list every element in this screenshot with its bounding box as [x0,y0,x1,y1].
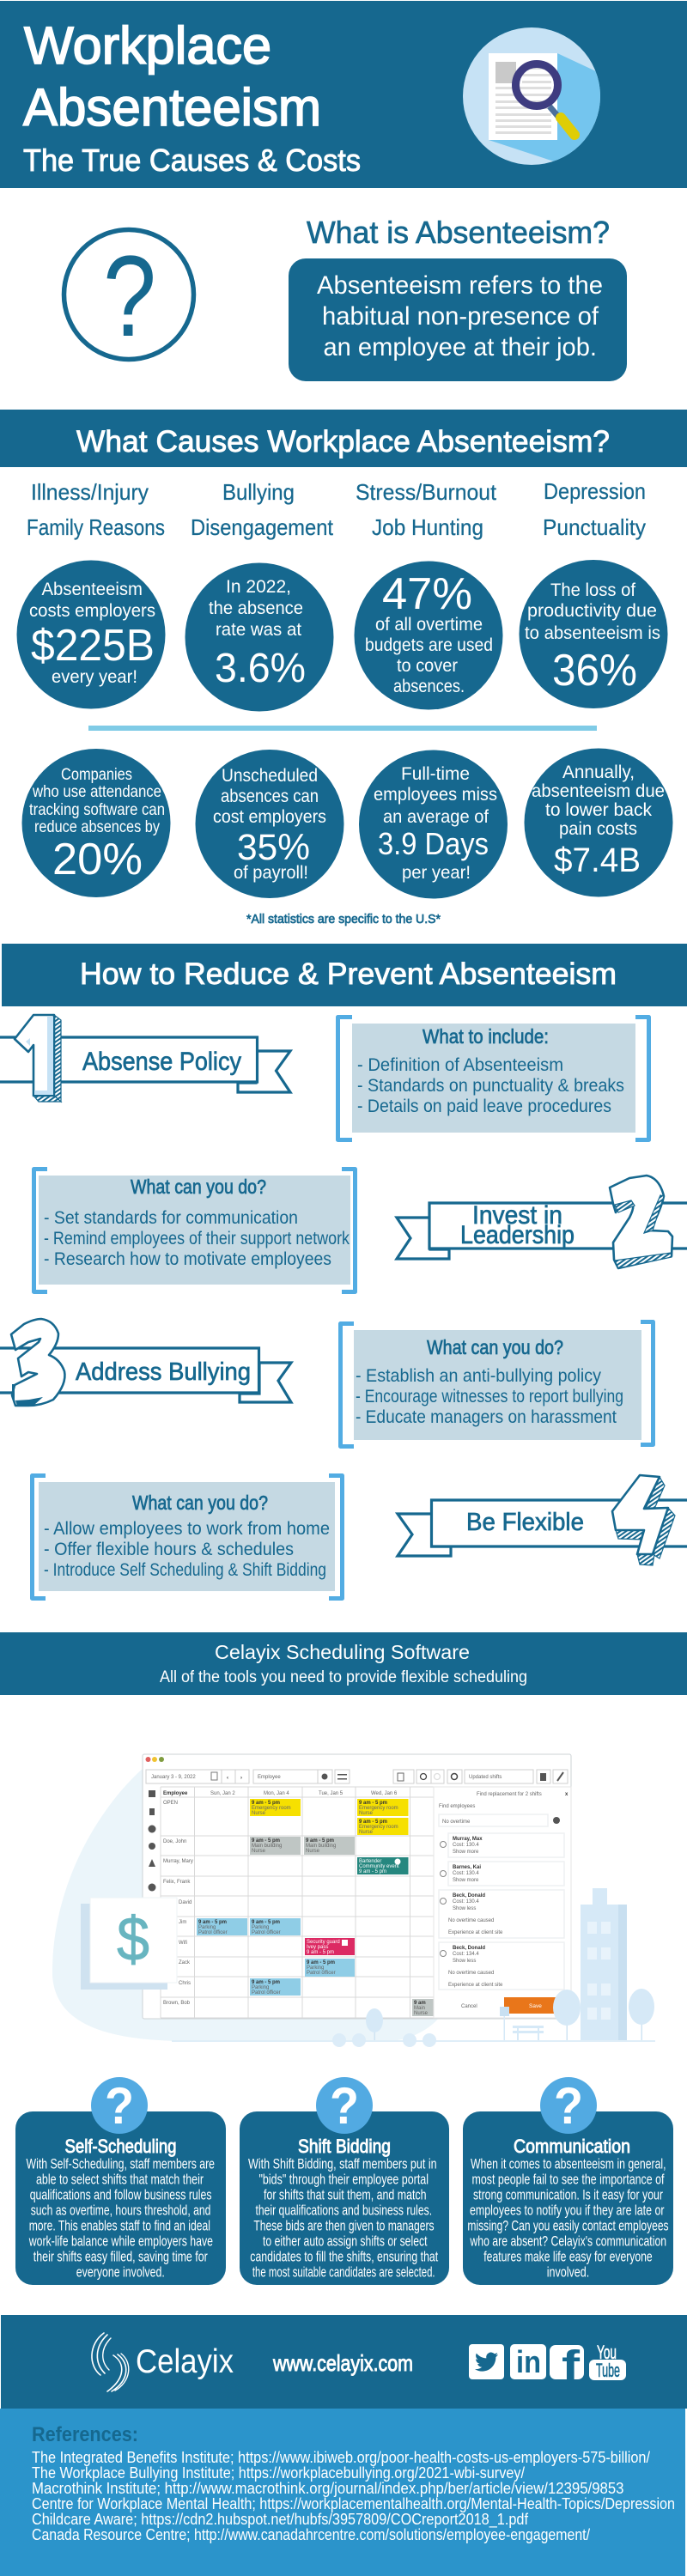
schedule grid: David [179,1900,192,1905]
stat circle: 47% [354,562,503,709]
shift blocks: Main building [252,1844,282,1849]
stat circle: 3.9 days: an average of [383,807,489,827]
title: Absenteeism [23,78,321,137]
icon: question badge: ? [105,2077,134,2135]
stat circle: 7.4B [524,749,673,896]
stat circle: 35%: absences can [221,787,319,806]
replacement side panel: Beck, Donald [453,1946,485,1951]
panel: bullying actions [340,1322,653,1446]
stat circle: 35%: 35% [237,827,310,868]
panel: what to include: - Standards on punctuality & breaks [357,1076,624,1096]
list of causes: Illness/Injury [31,479,149,505]
app window [143,1754,571,2019]
shift blocks: 9 am - 5 pm [307,1950,334,1955]
stat circle: 35%: cost employers [213,807,326,827]
shift blocks: Main [414,2006,425,2011]
shift blocks: Community event [359,1864,399,1869]
stat circle: 7.4B: absenteeism due [532,781,665,801]
shift blocks: Parking [252,1985,269,1990]
panel: shift bidding: the most suitable candidates are selected. [252,2264,435,2281]
shift blocks: Bartender [359,1859,381,1864]
shift blocks: 9 am - 5 pm [307,1960,335,1965]
panel: shift bidding: to either auto assign shifts or select [263,2233,428,2250]
icon: youtube: You [597,2342,617,2363]
stat circle: 3.9 days: Full-time [401,764,470,784]
panel: self-scheduling: their shifts easy filled, saving time for [33,2249,208,2265]
panel: flexibility actions: What can you do? [132,1492,268,1514]
replacement side panel: Murray, Max [453,1837,483,1842]
shift blocks: 9 am - 5 pm [359,1820,387,1825]
replacement side panel: No overtime caused [448,1918,494,1923]
shift blocks: Security guard [307,1940,340,1945]
toolbar: Updated shifts [469,1775,502,1780]
list of causes: Stress/Burnout [356,479,497,505]
stat circle: 20%: tracking software can [29,801,165,819]
schedule grid: Wifi [179,1941,187,1946]
stat circle: 47%: absences. [393,677,465,696]
shift blocks: Nurse [414,2011,429,2016]
panel: flexibility actions: - Allow employees to work from home [44,1519,330,1539]
shift blocks: 9 am - 5 pm [359,1801,387,1806]
stat circle: 3.6%: 3.6% [215,646,306,691]
stat circle: 3.9 days: employees miss [374,785,497,805]
section banner: causes: What Causes Workplace Absenteeism? [76,425,610,459]
ribbon 3: address bullying [0,1319,291,1406]
stat circle: 36%: to absenteeism is [525,623,660,643]
shift blocks: 9 am - 5 pm [252,1801,280,1806]
title [23,16,321,137]
toolbar: Employee [258,1775,281,1780]
stat circle: 225B: costs employers [29,601,155,621]
replacement side panel: Experience at client site [448,1930,503,1935]
ribbon 2: invest in leadership: Leadership [460,1221,575,1249]
stat circle: 7.4B: $7.4B [554,841,641,879]
definition box: Absenteeism refers to the [317,271,603,300]
shift blocks: Patrol officer [198,1930,228,1935]
schedule grid: Tue, Jan 5 [319,1791,344,1796]
schedule grid: Employee [163,1791,188,1796]
panel: leadership actions [34,1170,356,1291]
section banner: scheduling software [0,1632,687,1695]
shift blocks: Nurse [306,1849,320,1854]
panel: shift bidding: their qualifications and business rules. [256,2202,432,2219]
stat circle: 7.4B: pain costs [559,819,637,839]
stat circle: 35% [196,750,344,898]
panel: leadership actions: - Research how to motivate employees [44,1249,331,1269]
ribbon 1: absence policy [0,1015,290,1102]
list of causes: Depression [544,478,646,504]
definition box: habitual non-presence of [322,302,599,331]
icon: facebook [550,2343,584,2389]
website: www.celayix.com [272,2350,413,2376]
shift blocks: Nurse [359,1830,374,1835]
shift blocks: Nurse [252,1849,266,1854]
stat circle: 3.9 days: 3.9 Days [378,826,489,861]
shift blocks: Parking [198,1925,216,1930]
schedule grid: OPEN [163,1801,178,1806]
stat circle: 3.6%: In 2022, [226,577,291,597]
stat circle: 47%: 47% [382,569,472,619]
panel: shift bidding: These bids are then given to managers [253,2218,435,2234]
panel: leadership actions: - Remind employees of their support network [44,1229,350,1249]
schedule grid: Mon, Jan 4 [264,1791,289,1796]
toolbar: ‹ [227,1776,228,1781]
replacement side panel: Beck, Donald [453,1893,485,1899]
schedule grid: Brown, Bob [163,2001,191,2006]
panel: shift bidding [240,2077,449,2285]
replacement side panel: x [565,1792,568,1797]
section banner: reduce and prevent [2,944,687,1006]
references panel [0,2409,685,2576]
list of causes: Job Hunting [372,514,483,540]
icon: linkedin: in [516,2344,541,2379]
icon: twitter [469,2344,504,2379]
replacement side panel [434,1787,571,2018]
panel: what to include: - Definition of Absenteeism [357,1055,563,1075]
panel: self-scheduling: work-life balance while employers have [28,2233,213,2250]
panel: what to include: What to include: [423,1025,549,1048]
title: Workplace [24,16,271,75]
replacement side panel: Find employees [439,1804,475,1809]
shift blocks: 9 am - 5 pm [198,1920,227,1925]
stat circle: 20%: Companies [61,766,132,784]
city skyline [172,1888,655,2047]
shift blocks [197,1799,434,2016]
stat circle: 20%: reduce absences by [34,818,160,836]
icon: question badge [91,2077,148,2135]
panel: self-scheduling: qualifications and follow business rules [30,2187,212,2203]
stat circle: 20%: 20% [52,835,143,884]
panel: shift bidding: Shift Bidding [298,2136,391,2157]
section banner: causes [0,410,687,467]
schedule grid: Chris [179,1981,191,1986]
statistics footnote: *All statistics are specific to the U.S* [246,912,441,927]
stat circle: 7.4B: Annually, [562,762,635,782]
stat circle: 225B: $225B [31,621,155,671]
shift blocks: Main building [306,1844,336,1849]
list of causes: Punctuality [543,514,646,540]
shift blocks: Patrol officer [252,1930,281,1935]
toolbar [146,1770,568,1783]
definition box: an employee at their job. [323,333,597,361]
list of causes [27,478,646,540]
replacement side panel: No overtime caused [448,1971,494,1976]
shift blocks: Emergency room [359,1825,398,1830]
logo: Celayix [92,2333,234,2391]
schedule grid: Doe, John [163,1839,186,1844]
panel: bullying actions: - Encourage witnesses to report bullying [356,1387,623,1406]
shift blocks: 9 am [414,2001,426,2006]
list of causes: Family Reasons [27,514,165,540]
panel: flexibility actions [33,1475,342,1599]
icon: youtube: Tube [596,2360,620,2381]
shift blocks: Parking [252,1925,269,1930]
definition box [289,258,627,381]
schedule grid: Jim [179,1920,186,1925]
panel: shift bidding: With Shift Bidding, staff members put in [248,2156,437,2172]
header banner [0,1,687,188]
schedule grid: Murray, Mary [163,1859,193,1864]
stat circle: 47%: budgets are used [365,635,493,655]
shift blocks: Parking [307,1965,324,1971]
stat circle: 3.9 days [359,750,508,898]
shift blocks: Nurse [359,1811,374,1816]
logo: Celayix: Celayix [136,2343,234,2380]
replacement side panel: Show more [453,1878,479,1883]
references list: Childcare Aware; https://cdn2.hubspot.net/hubfs/3957809/COCreport2018_1.pdf [32,2511,529,2529]
panel: shift bidding: candidates to fill the shifts, ensuring that [250,2249,438,2265]
panel: flexibility actions: - Introduce Self Scheduling & Shift Bidding [44,1560,326,1580]
shift blocks: Patrol officer [307,1971,336,1976]
shift blocks: Emergency room [359,1806,398,1811]
stat circle: 36%: productivity due [527,601,657,621]
stat circle: 20% [22,749,170,897]
icon: question mark circle: ? [103,233,156,361]
section banner: scheduling software: All of the tools you need to provide flexible scheduling [160,1668,527,1686]
panel: self-scheduling: With Self-Scheduling, staff members are [26,2156,215,2172]
references list: Canada Resource Centre; http://www.canadahrcentre.com/solutions/employee-engagement/ [32,2526,590,2543]
icon: question badge: ? [554,2077,583,2135]
panel: communication: Communication [514,2136,630,2157]
replacement side panel: Find replacement for 2 shifts [477,1792,542,1797]
schedule grid: Zack [179,1960,191,1965]
replacement side panel: Show more [453,1850,479,1855]
toolbar: January 3 - 9, 2022 [151,1775,196,1780]
list of causes: Disengagement [191,514,334,540]
stat circle: 47%: to cover [397,656,458,676]
replacement side panel: Save [529,2003,542,2009]
shift blocks: 9 am - 5 pm [252,1838,280,1844]
footer banner [1,2315,687,2409]
shift blocks: 9 am - 5 pm [359,1869,386,1874]
icon: facebook: f [562,2343,581,2389]
replacement side panel: Show less [453,1906,476,1911]
ribbon 1: absence policy: Absense Policy [82,1048,241,1076]
toolbar: › [240,1776,242,1781]
panel: what to include: - Details on paid leave procedures [357,1097,611,1116]
number 4 [612,1475,675,1565]
stat circle: 35%: of payroll! [234,863,308,883]
shift blocks: 9 am - 5 pm [252,1920,280,1925]
shift blocks: Ivey pass [307,1945,328,1950]
number 3 [11,1319,64,1406]
panel: leadership actions: What can you do? [131,1176,266,1198]
replacement side panel: Show less [453,1959,476,1964]
panel: communication: involved. [547,2264,589,2281]
sidebar icons [148,1790,156,1891]
stat circle: 36% [519,560,668,708]
panel: self-scheduling: such as overtime, hours threshold, and [31,2202,210,2219]
panel: self-scheduling: everyone involved. [76,2264,165,2281]
stat circle: 3.6% [185,563,333,711]
panel: bullying actions: - Establish an anti-bullying policy [356,1366,601,1386]
shift blocks: 9 am - 5 pm [306,1838,334,1844]
stat circle: 3.9 days: per year! [402,863,471,883]
icon: question badge [316,2077,373,2135]
references list [32,2449,675,2543]
panel: self-scheduling: Self-Scheduling [65,2136,177,2157]
heading: what is absenteeism: What is Absenteeism? [307,215,610,250]
replacement side panel: Cost: 130.4 [453,1843,479,1848]
section banner: reduce and prevent: How to Reduce & Prevent Absenteeism [80,957,617,991]
schedule grid: Felix, Frank [163,1880,191,1885]
illustration: scheduling software screenshot [52,1754,655,2047]
replacement side panel: No overtime [442,1820,471,1825]
replacement side panel: Cost: 130.4 [453,1899,479,1905]
panel: bullying actions: - Educate managers on harassment [356,1407,617,1427]
stat circle: 7.4B: to lower back [545,800,652,820]
references list: Macrothink Institute; http://www.macrothink.org/journal/index.php/ber/article/view/12395/9853 [32,2480,623,2497]
replacement side panel: Barnes, Kai [453,1865,481,1870]
number 1 [15,1015,61,1102]
panel: communication [463,2077,673,2285]
stat circle: 36%: The loss of [550,580,635,600]
replacement side panel: Cancel [461,2004,477,2009]
stat circle: 36%: 36% [552,646,637,696]
number 2 [610,1176,672,1268]
panel: flexibility actions: - Offer flexible hours & schedules [44,1540,294,1559]
ribbon 2: invest in leadership: Invest in [472,1201,562,1230]
schedule grid [161,1787,434,2018]
shift blocks: Emergency room [252,1806,291,1811]
stat circle: 225B: every year! [52,667,137,687]
stat circle: 47%: of all overtime [375,615,483,635]
dollar card: $ [117,1905,149,1974]
section banner: scheduling software: Celayix Scheduling Software [215,1641,470,1663]
ribbon 4: be flexible [398,1475,687,1565]
icon: youtube [589,2342,626,2381]
icon: question badge: ? [330,2077,359,2135]
icon: magnified document [463,27,600,165]
shift blocks: 9 am - 5 pm [252,1980,280,1985]
list of causes: Bullying [222,479,295,505]
replacement side panel: Cost: 134.4 [453,1952,479,1957]
panel: self-scheduling [15,2077,226,2285]
ribbon 4: be flexible: Be Flexible [466,1509,584,1536]
ribbon 3: address bullying: Address Bullying [76,1358,251,1386]
stat circle: 3.6%: rate was at [216,620,301,640]
references heading: References: [32,2423,138,2446]
schedule grid: Wed, Jan 6 [371,1791,398,1796]
panel: bullying actions: What can you do? [427,1336,563,1358]
panel: self-scheduling: able to select shifts that match their [36,2172,204,2188]
icon: question badge [540,2077,597,2135]
replacement side panel: Experience at client site [448,1983,503,1988]
panel: self-scheduling: more. This enables staff to find an ideal [29,2218,210,2234]
shift blocks: Nurse [252,1811,266,1816]
dollar card [81,1898,177,1990]
stat circle: 225B [17,560,165,709]
stat circle: 35%: Unscheduled [222,766,318,786]
replacement side panel: Cost: 130.4 [453,1871,479,1876]
stat circle: 225B: Absenteeism [41,580,143,599]
schedule grid: Sun, Jan 2 [210,1791,235,1796]
icon: question mark circle [64,230,194,361]
subtitle: The True Causes & Costs [23,143,361,178]
panel: leadership actions: - Set standards for communication [44,1208,298,1228]
panel: shift bidding: "bids" through their employee portal [259,2172,429,2188]
background blob [52,1767,442,2041]
stat circle: 20%: who use attendance [32,783,161,801]
panel: what to include [338,1017,649,1140]
stat circle: 3.6%: the absence [209,598,303,618]
references list: The Workplace Bullying Institute; https://workplacebullying.org/2021-wbi-survey/ [32,2464,525,2482]
panel: shift bidding: for shifts that suit them, and match [264,2187,426,2203]
ribbon 2: invest in leadership [397,1176,687,1268]
shift blocks: Patrol officer [252,1990,281,1996]
